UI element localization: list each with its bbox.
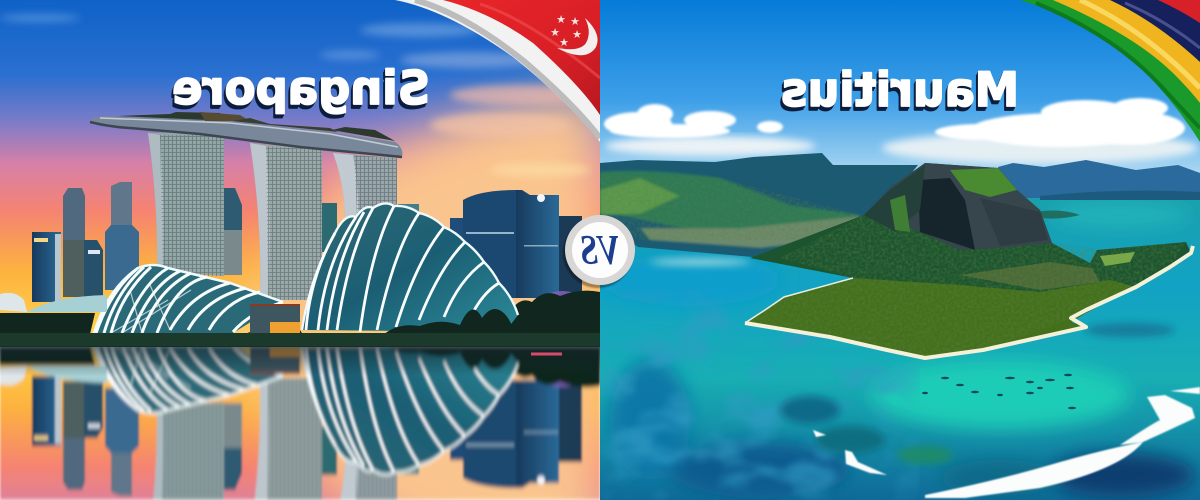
SkyPark deck: [89, 112, 402, 157]
stars: ★: [550, 26, 560, 39]
flag: Mauritius: [1020, 0, 1200, 142]
sky at sunset: [0, 0, 600, 340]
low pavilion dome and shore: [0, 293, 600, 347]
stars: ★: [572, 28, 582, 41]
badge: VS: VS: [580, 228, 620, 274]
stars: ★: [556, 13, 566, 26]
fishing boats: [922, 374, 1076, 409]
shore trees behind domes: [505, 291, 600, 340]
heading: Singapore: Singapore: [172, 61, 430, 115]
stars: [550, 15, 582, 46]
lagoon: [600, 195, 1200, 500]
western range: [600, 153, 918, 277]
distant mountains: [998, 160, 1200, 219]
flag: Singapore: [395, 0, 600, 142]
cliff of Le Morne: [864, 163, 1052, 250]
clouds: [604, 98, 1198, 164]
panel: Singapore: [0, 0, 600, 500]
heading: Mauritius: Mauritius: [781, 63, 1019, 118]
water reflection: [0, 346, 600, 500]
stars: ★: [570, 15, 580, 28]
surf on the reef: [813, 387, 1200, 498]
Le Morne peninsula: [745, 163, 1193, 358]
skyline towers: [32, 182, 582, 303]
Marina Bay Sands towers: [148, 132, 397, 300]
sky: [600, 0, 1200, 173]
stars: ★: [559, 36, 569, 49]
dome: Cloud Forest: [302, 203, 518, 332]
dome: Flower Dome: [94, 265, 283, 333]
forest texture: [745, 215, 1186, 358]
panel: Mauritius: [600, 0, 1200, 500]
reef patches: [600, 290, 920, 500]
badge: VS: [563, 215, 635, 288]
crescent moon: [557, 18, 598, 55]
white beach: [745, 246, 1193, 358]
